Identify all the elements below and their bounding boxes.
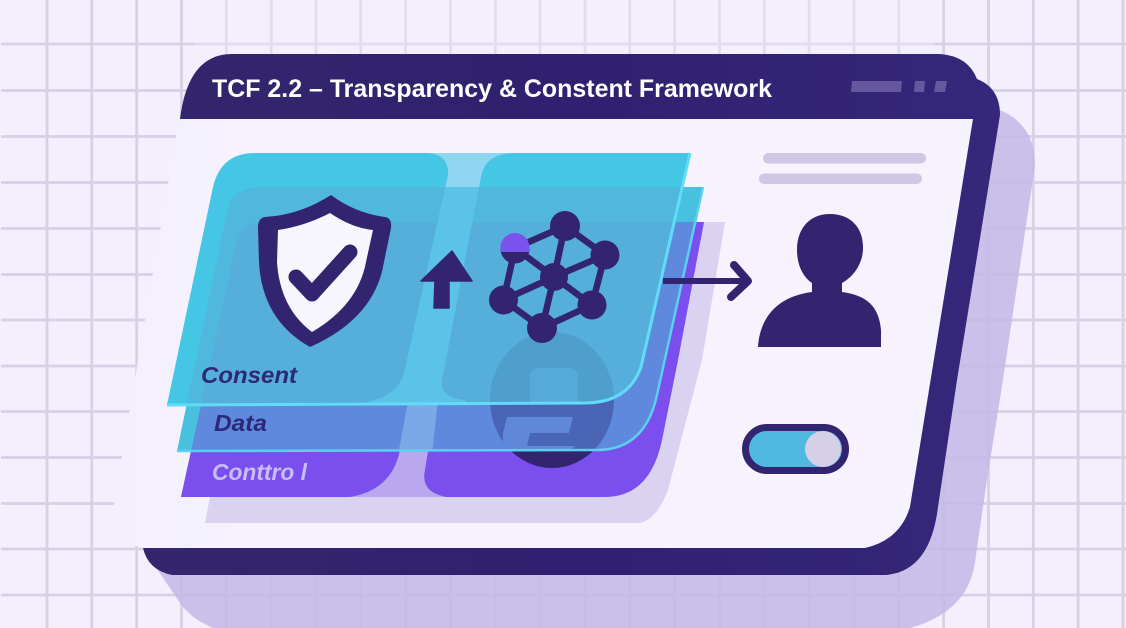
grid fade above the window <box>195 0 935 54</box>
icon: user silhouette <box>758 214 881 347</box>
toggle switch <box>746 428 846 470</box>
icon: up arrow <box>421 251 472 308</box>
card drop shadow <box>155 110 1035 628</box>
layer: consent sheet <box>167 152 692 406</box>
icon: network graph <box>489 211 620 343</box>
window body <box>114 119 973 548</box>
title: TCF 2.2 – Transparency & Constent Framework <box>212 75 772 103</box>
layer: control sheet <box>181 222 704 497</box>
layer: backing shadow sheet <box>205 222 725 523</box>
label: Data: Data <box>214 410 267 436</box>
label: Consent: Consent <box>201 362 298 388</box>
placeholder text lines <box>759 153 926 184</box>
label: Control: Conttro l <box>212 459 308 485</box>
icon: shield with check <box>258 195 391 347</box>
window frame and title bar <box>143 54 1000 575</box>
layer: data sheet <box>177 186 704 452</box>
window controls <box>851 81 947 92</box>
arrow: to user <box>663 265 748 297</box>
